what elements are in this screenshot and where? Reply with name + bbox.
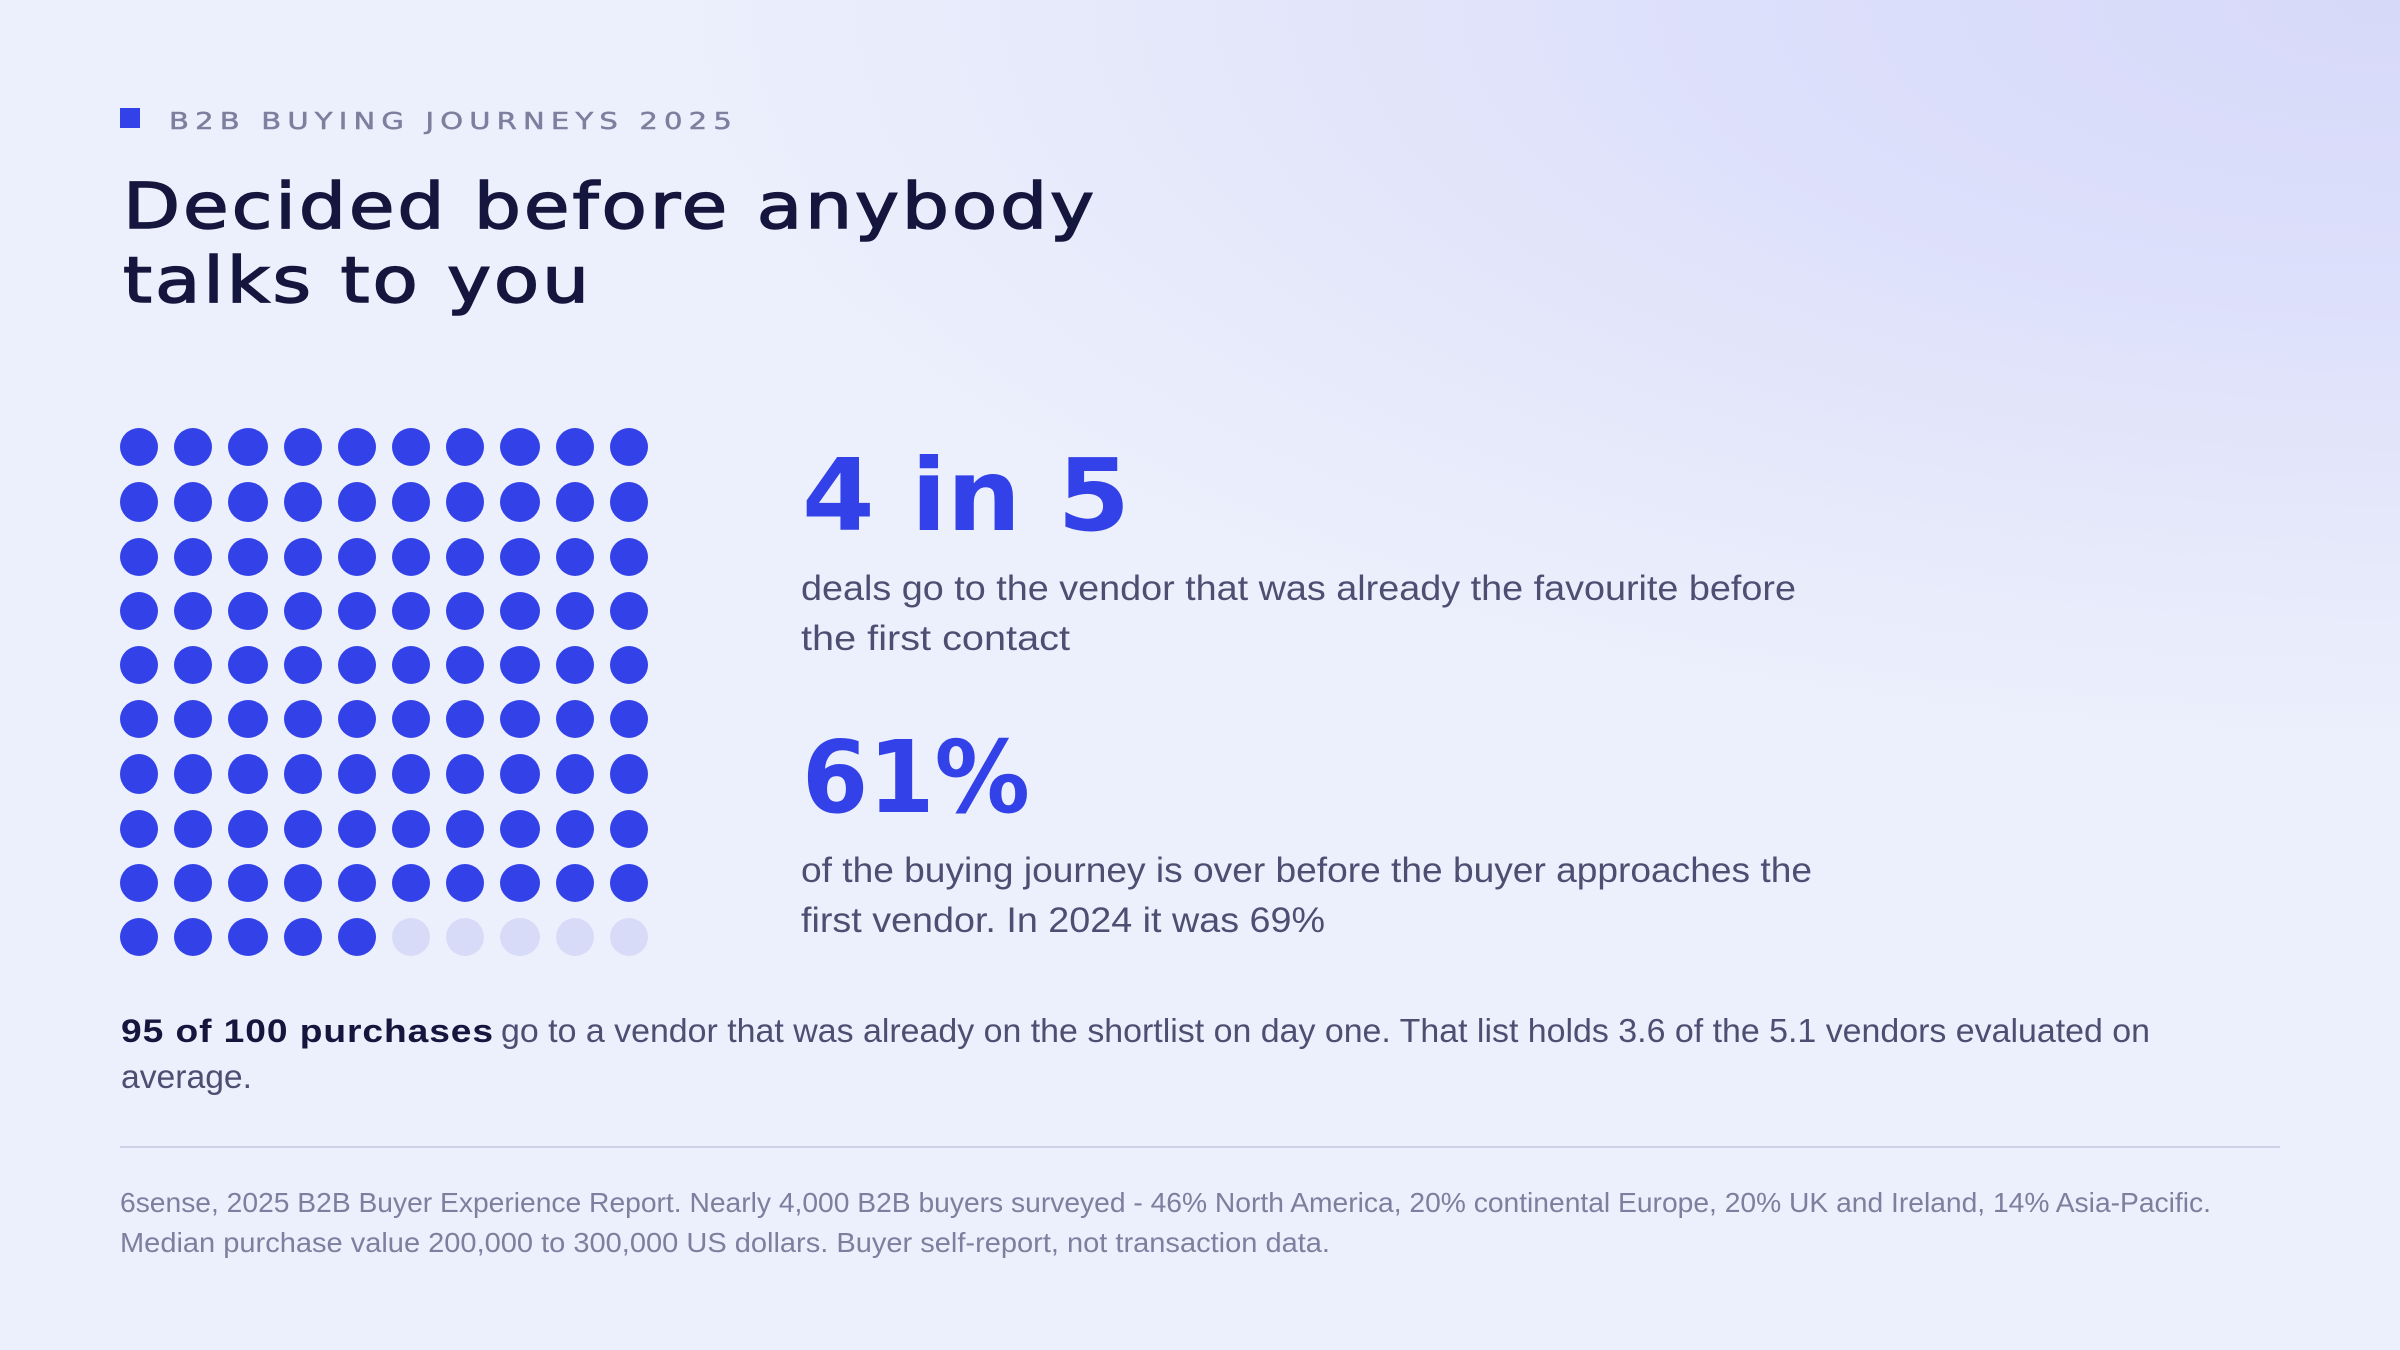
title: talks to you xyxy=(123,244,592,317)
stat: 61% xyxy=(801,719,1812,940)
stat description: deals go to the vendor that was already the favourite before xyxy=(801,569,1796,608)
stat description: the first contact xyxy=(801,619,1070,658)
summary text: 95 of 100 purchases xyxy=(121,1013,494,1049)
title xyxy=(123,170,1097,317)
source footnote xyxy=(120,1187,2211,1258)
stat: 4 in 5 xyxy=(801,437,1796,658)
stat number: 61% xyxy=(802,719,1030,836)
summary text xyxy=(121,1012,2150,1095)
stat number: 4 in 5 xyxy=(802,437,1130,554)
source footnote: Median purchase value 200,000 to 300,000 US dollars. Buyer self-report, not transaction data. xyxy=(120,1227,1330,1258)
stat description xyxy=(801,851,1812,940)
title: Decided before anybody xyxy=(123,170,1097,243)
summary text: average. xyxy=(121,1058,252,1095)
source footnote: 6sense, 2025 B2B Buyer Experience Report. Nearly 4,000 B2B buyers surveyed - 46% North America, 20% continental Europe, 20% UK and Ireland, 14% Asia-Pacific. xyxy=(120,1187,2211,1218)
waffle chart: 95 of 100 xyxy=(120,428,648,956)
stat description: first vendor. In 2024 it was 69% xyxy=(801,901,1325,940)
summary text: go to a vendor that was already on the shortlist on day one. That list holds 3.6 of the 5.1 vendors evaluated on xyxy=(501,1012,2150,1049)
stat description: of the buying journey is over before the buyer approaches the xyxy=(801,851,1812,890)
eyebrow: B2B BUYING JOURNEYS 2025 xyxy=(169,107,738,135)
stat description xyxy=(801,569,1796,658)
